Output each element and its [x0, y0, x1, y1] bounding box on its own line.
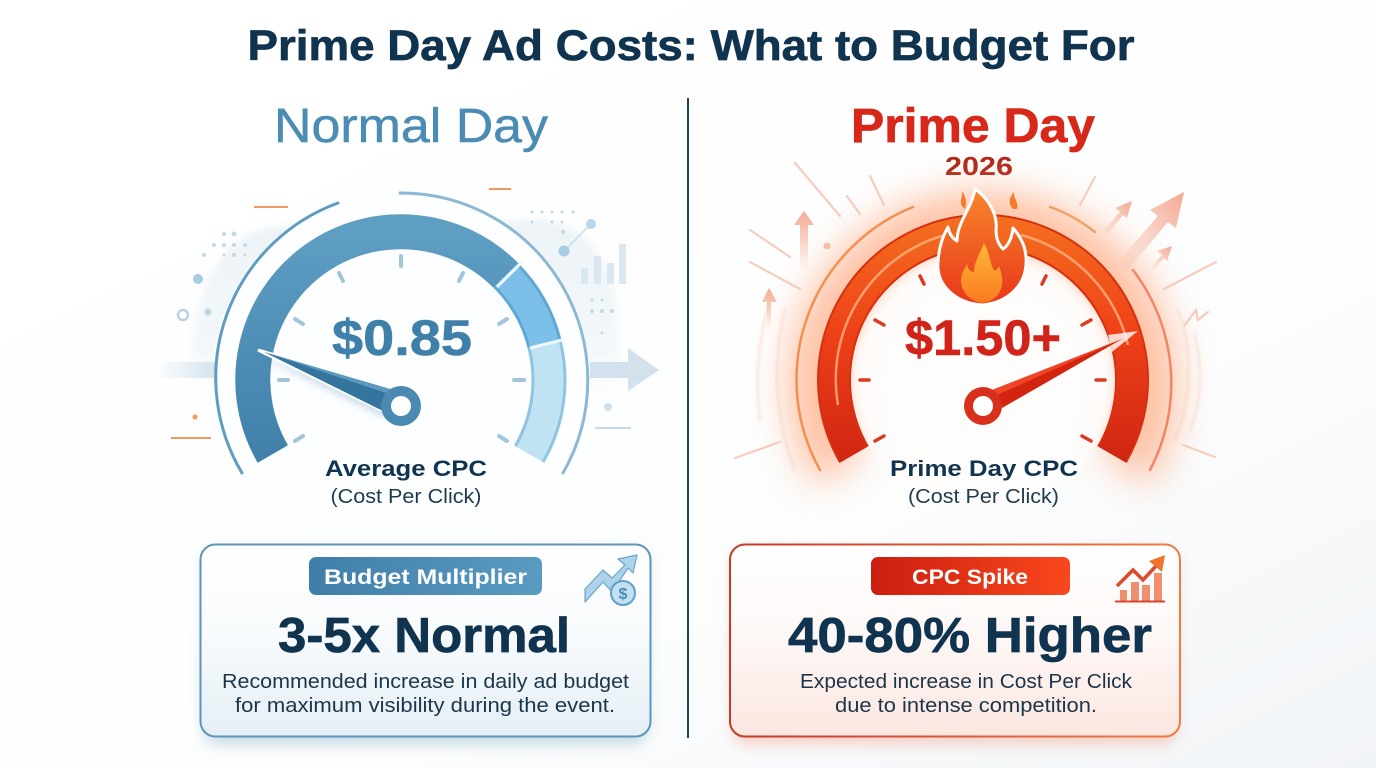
- gauge label: average CPC: [325, 456, 487, 508]
- gauge: normal day: [216, 193, 588, 473]
- center divider: [687, 98, 689, 738]
- needle: [964, 331, 1138, 425]
- card: CPC spike: [730, 544, 1180, 744]
- heading: prime day: 2026: [945, 151, 1013, 181]
- panel: normal day: [155, 100, 659, 744]
- value: normal day CPC: $0.85: [332, 310, 472, 366]
- title: Prime Day Ad Costs: What to Budget For: [248, 22, 1135, 70]
- icon: rising bar chart: [1115, 555, 1165, 602]
- icon: flame: [938, 189, 1026, 305]
- description: CPC: Expected increase in Cost Per Click: [800, 671, 1133, 693]
- badge: budget multiplier: [309, 557, 542, 595]
- gauge label: average CPC: Average CPC: [325, 456, 487, 481]
- description: budget: Recommended increase in daily ad budget: [222, 671, 629, 693]
- decorative data background: [155, 189, 659, 569]
- heading: prime day: [851, 100, 1095, 181]
- gauge label: prime day CPC: (Cost Per Click): [908, 485, 1059, 508]
- heading: prime day: Prime Day: [851, 100, 1095, 153]
- icon: growth arrow with dollar coin: [585, 555, 637, 605]
- heading: normal day: Normal Day: [274, 100, 548, 153]
- value: prime day CPC: $1.50+: [905, 310, 1061, 366]
- gauge label: average CPC: (Cost Per Click): [330, 485, 482, 508]
- panel: prime day: [730, 100, 1216, 744]
- decorative rays and rising arrows: [735, 163, 1216, 470]
- description: CPC: [800, 671, 1133, 717]
- gauge label: prime day CPC: [890, 456, 1078, 508]
- badge: CPC spike: CPC Spike: [912, 565, 1028, 589]
- glow behind gauge: [817, 220, 1149, 470]
- description: CPC: due to intense competition.: [835, 695, 1097, 717]
- description: budget: for maximum visibility during the event.: [235, 695, 615, 717]
- big number: 40-80% higher: 40-80% Higher: [788, 609, 1152, 663]
- gauge: prime day: [797, 207, 1171, 508]
- badge: CPC spike: [871, 557, 1070, 595]
- description: budget: [222, 671, 629, 717]
- gauge label: prime day CPC: Prime Day CPC: [890, 456, 1078, 481]
- icon: growth arrow with dollar coin: $: [619, 586, 628, 603]
- card: budget multiplier: [200, 544, 650, 744]
- needle: [258, 350, 421, 426]
- big number: 3-5x normal: 3-5x Normal: [278, 609, 570, 663]
- badge: budget multiplier: Budget Multiplier: [324, 565, 528, 589]
